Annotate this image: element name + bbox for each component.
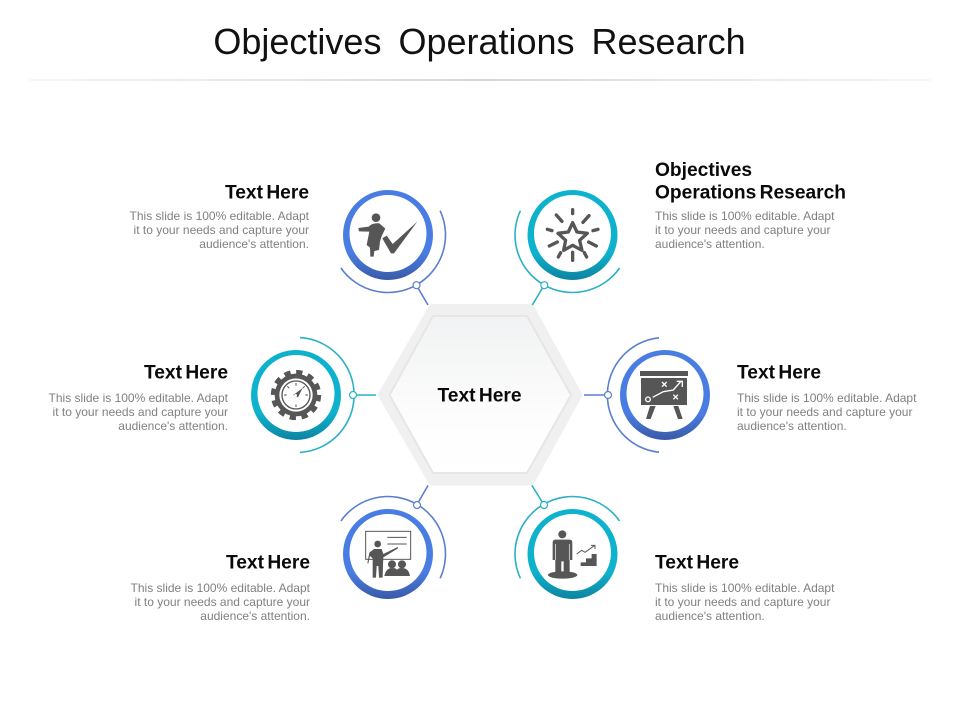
text block: right: This slide is 100% editable. Adapt <box>737 391 917 405</box>
text block: bottom left: audience's attention. <box>200 609 310 623</box>
text block: left: Text Here <box>144 362 228 384</box>
text block: bottom right: This slide is 100% editable. Adapt <box>655 581 835 595</box>
central hexagon <box>379 306 581 484</box>
text block: left: This slide is 100% editable. Adapt <box>49 391 229 405</box>
text block: top right: This slide is 100% editable. Adapt <box>655 209 835 223</box>
icon: strategy board <box>640 371 688 419</box>
text block: bottom right: Text Here <box>655 552 739 574</box>
icon: person with rising steps <box>548 530 597 579</box>
text block: right: Text Here <box>737 362 821 384</box>
text block: bottom right <box>655 552 835 623</box>
text block: top right: Operations Research <box>655 182 846 204</box>
icon: person with check mark <box>358 213 417 257</box>
text block: top left: Text Here <box>225 182 309 204</box>
text block: right: audience's attention. <box>737 419 847 433</box>
text block: top right: it to your needs and capture your <box>655 223 830 237</box>
text block: left: audience's attention. <box>118 419 228 433</box>
icon: presenter with audience <box>366 531 411 578</box>
text block: bottom left <box>131 552 311 623</box>
text block: top left: it to your needs and capture your <box>134 223 309 237</box>
text block: top left: audience's attention. <box>199 237 309 251</box>
node: bottom right <box>515 486 620 599</box>
node: top right <box>515 190 620 305</box>
node: left <box>251 338 376 452</box>
text block: bottom left: Text Here <box>226 552 310 574</box>
node: right <box>584 338 710 452</box>
text block: left: it to your needs and capture your <box>53 405 228 419</box>
hexagon label: Text Here <box>437 386 522 406</box>
text block: bottom left: it to your needs and capture your <box>135 595 310 609</box>
node: bottom left <box>341 486 445 599</box>
text block: right <box>737 362 917 433</box>
text block: right: it to your needs and capture your <box>737 405 912 419</box>
title: Objectives Operations Research <box>213 21 746 62</box>
text block: top left <box>130 182 310 251</box>
text block: bottom left: This slide is 100% editable. Adapt <box>131 581 311 595</box>
text block: bottom right: it to your needs and capture your <box>655 595 830 609</box>
node: top left <box>341 190 445 305</box>
text block: top right: Objectives <box>655 160 752 181</box>
text block: left <box>49 362 229 433</box>
text block: top right: audience's attention. <box>655 237 765 251</box>
text block: top left: This slide is 100% editable. Adapt <box>130 209 310 223</box>
icon: star with rays <box>547 210 598 260</box>
text block: bottom right: audience's attention. <box>655 609 765 623</box>
icon: gear with gauge <box>273 372 319 418</box>
text block: top right <box>655 160 846 251</box>
